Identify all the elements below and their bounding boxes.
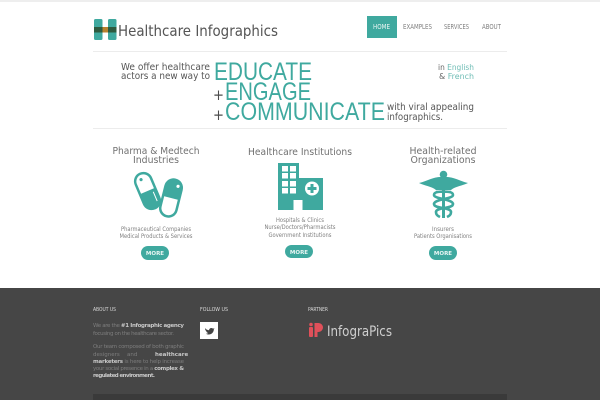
institutions list: Government Institutions <box>268 232 332 239</box>
hero closing text: with viral appealing <box>387 102 474 113</box>
about text: regulated environment. <box>93 373 155 379</box>
hero message <box>121 58 474 126</box>
about text: marketers is here to help increase <box>93 359 185 365</box>
language note: in English <box>438 63 474 72</box>
heading: organizations: Health-related <box>410 146 476 157</box>
about text: your social presence in a complex & <box>93 366 184 372</box>
about text: designers <box>93 352 120 358</box>
pharma list: Medical Products & Services <box>120 233 192 240</box>
language note: & French <box>439 72 474 81</box>
panel: healthcare institutions <box>248 147 352 258</box>
panel: pharma and medtech <box>112 146 200 260</box>
about heading: ABOUT US <box>93 307 116 313</box>
hero intro text <box>121 62 210 82</box>
hero closing text: infographics. <box>387 112 443 123</box>
pharma list: Pharmaceutical Companies <box>121 226 191 233</box>
footer column: follow us <box>200 307 228 339</box>
nav link: services: SERVICES <box>444 23 469 31</box>
about text <box>93 323 188 379</box>
headline: educate: EDUCATE <box>214 58 312 86</box>
logo <box>94 19 278 40</box>
icon: H logo <box>94 19 116 40</box>
nav link: about: ABOUT <box>482 23 502 31</box>
about text: healthcare <box>155 352 188 358</box>
nav active: home: HOME <box>373 23 390 31</box>
logo wordmark: Healthcare Infographics <box>118 22 278 40</box>
language note <box>438 63 474 81</box>
heading: pharma <box>112 146 200 166</box>
icon: twitter button <box>200 322 218 339</box>
footer column: partner <box>308 307 392 340</box>
headline: communicate: + <box>213 106 224 124</box>
pharma list <box>120 226 192 240</box>
headline: engage: ENGAGE <box>225 78 311 106</box>
heading: pharma: Industries <box>133 155 179 166</box>
organizations list: Insurers <box>432 226 454 233</box>
headline: engage: + <box>213 86 224 104</box>
icon: caduceus <box>419 171 468 218</box>
panel: health-related organizations <box>410 146 476 260</box>
nav link: examples: EXAMPLES <box>403 23 432 31</box>
hero intro text: actors a new way to <box>121 71 210 82</box>
institutions list: Nurse/Doctors/Pharmacists <box>264 224 336 231</box>
icon: pills <box>131 169 185 220</box>
about text: and <box>127 352 137 358</box>
follow heading: FOLLOW US <box>200 307 228 313</box>
button: more: MORE <box>290 250 308 256</box>
button: more: MORE <box>146 251 164 257</box>
organizations list: Patients Organisations <box>414 233 472 240</box>
partner wordmark: InfograPics <box>327 324 392 340</box>
heading: pharma: Pharma & Medtech <box>112 146 200 157</box>
footer column: about us <box>93 307 188 379</box>
heading: organizations: Organizations <box>410 155 476 166</box>
about text: Our team composed of both graphic <box>93 344 184 350</box>
institutions list: Hospitals & Clinics <box>276 217 324 224</box>
navigation <box>367 16 502 38</box>
about text: We are the #1 Infographic agency <box>93 323 184 329</box>
about text: focusing on the healthcare sector. <box>93 331 174 337</box>
icon: iP mark <box>309 323 323 337</box>
hero intro text: We offer healthcare <box>121 62 210 73</box>
heading: institutions: Healthcare Institutions <box>248 147 352 158</box>
institutions list <box>264 217 336 239</box>
button: more: MORE <box>434 251 452 257</box>
footer <box>0 288 600 400</box>
organizations list <box>414 226 472 240</box>
hero closing text <box>387 102 474 123</box>
headline: communicate: COMMUNICATE <box>225 98 385 126</box>
partner heading: PARTNER <box>308 307 328 313</box>
heading: organizations <box>410 146 476 166</box>
icon: hospital <box>278 163 323 210</box>
